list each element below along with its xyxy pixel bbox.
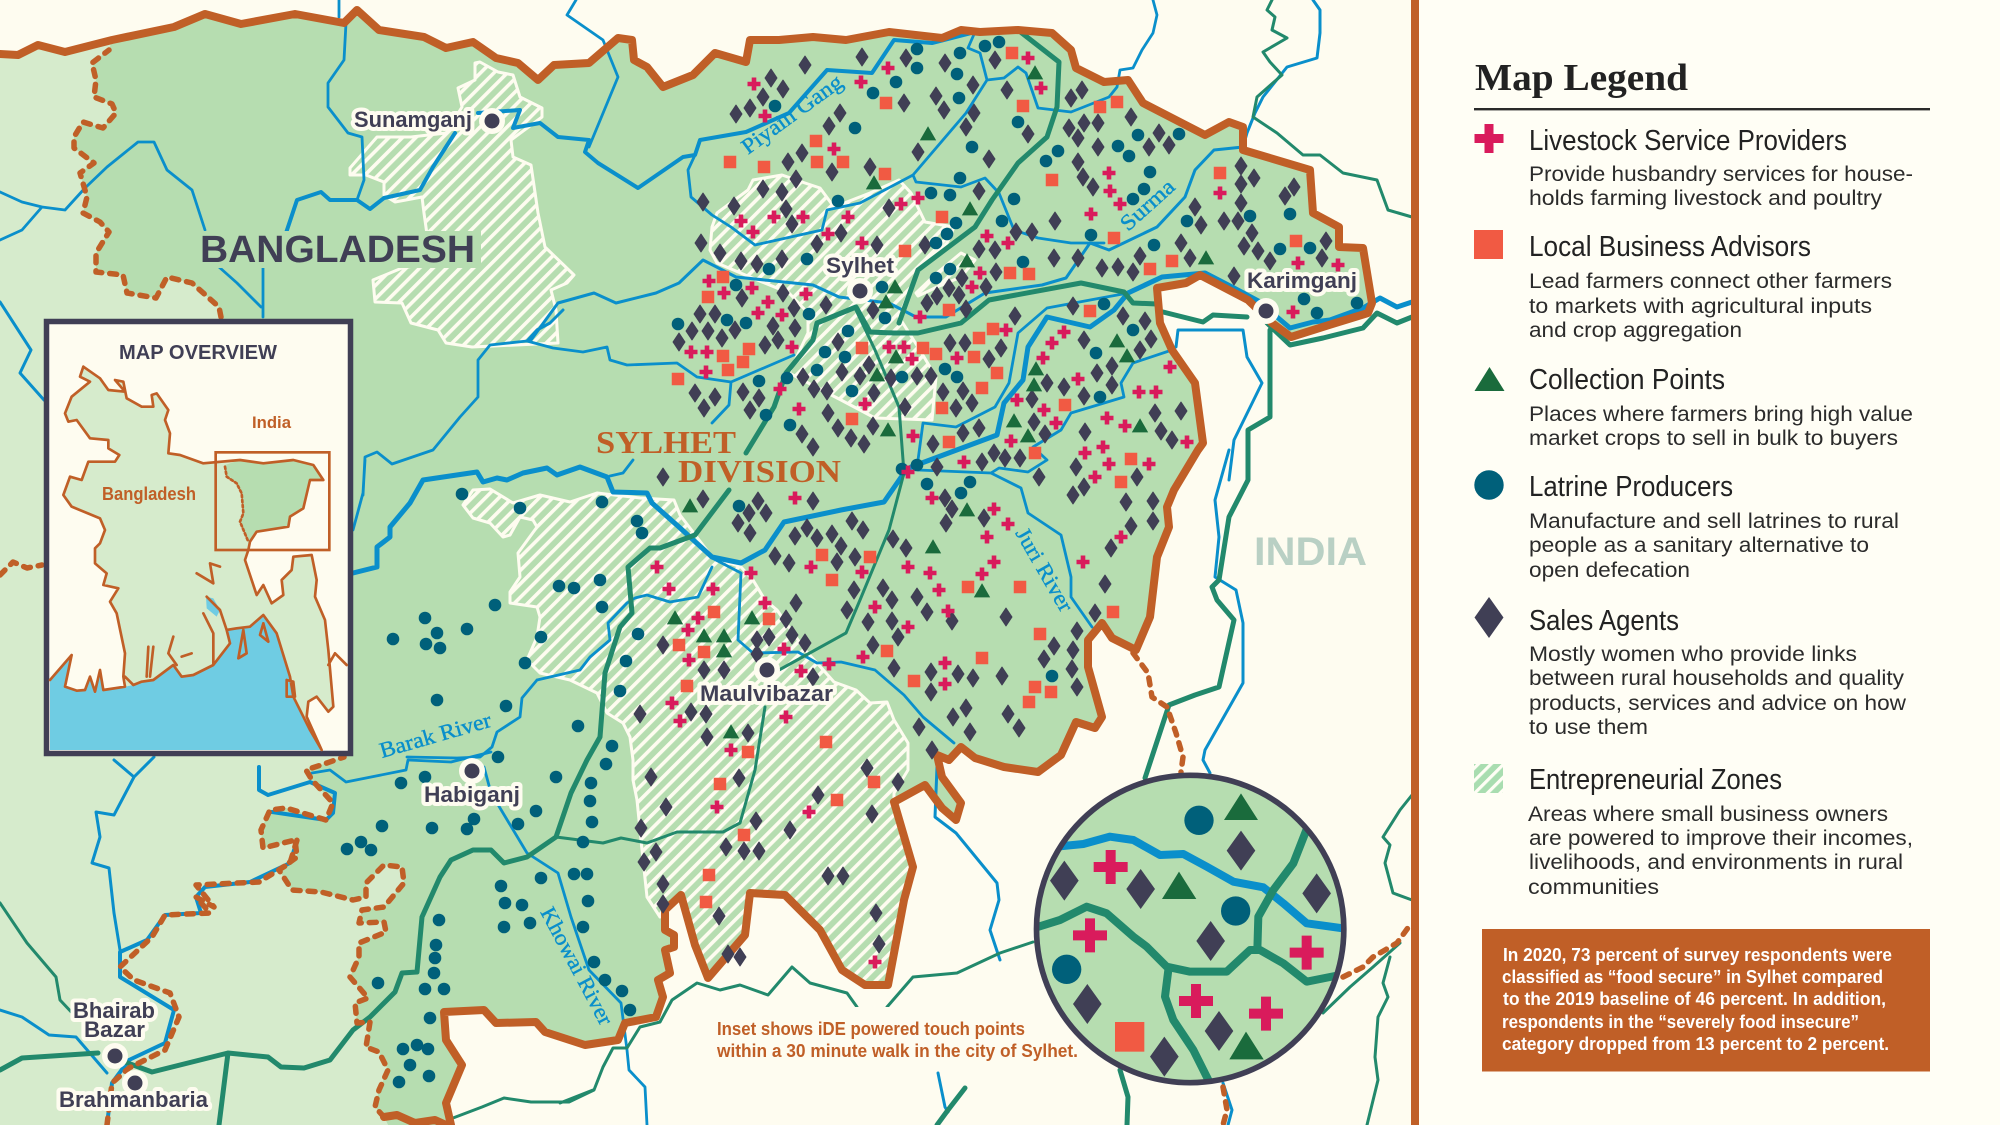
river labels [376, 69, 1180, 1030]
legend item: Entrepreneurial Zones: communities [1528, 875, 1659, 899]
legend item: Entrepreneurial Zones: Entrepreneurial Zones [1529, 764, 1782, 796]
legend item: Sales Agents: to use them [1529, 715, 1648, 739]
city: Maulvibazar: Maulvibazar [700, 681, 833, 706]
legend item: Livestock Service Providers [1474, 124, 1913, 210]
legend item: Latrine Producers: open defecation [1529, 558, 1690, 582]
city: Bhairab Bazar: Bhairab [73, 998, 155, 1023]
city: Habiganj: Habiganj [424, 782, 520, 807]
callout: food security statistics: In 2020, 73 percent of survey respondents were [1503, 944, 1892, 965]
legend item: Entrepreneurial Zones: Areas where small business owners [1528, 802, 1888, 826]
label: INDIA: INDIA [1254, 530, 1367, 574]
legend item: Local Business Advisors [1474, 230, 1892, 342]
legend item: Latrine Producers [1474, 470, 1899, 582]
river: Piyain Gang system [286, 32, 975, 233]
rivers: thin northern tributaries [0, 0, 1157, 317]
legend item: Collection Points [1474, 364, 1913, 450]
label: BANGLADESH: BANGLADESH [200, 229, 475, 271]
entrepreneurial zones (hatched areas) [350, 62, 975, 985]
river: Surma [527, 0, 1320, 341]
right panel: map legend [1411, 0, 2000, 1125]
inset note [708, 1007, 1086, 1071]
heading: Map Legend: Map Legend [1475, 57, 1688, 99]
panel: map overview [46, 322, 350, 754]
city: Brahmanbaria: Brahmanbaria [59, 1087, 209, 1112]
legend item: Local Business Advisors: and crop aggregation [1529, 318, 1742, 342]
road: thin roads [0, 0, 1412, 1125]
city: Sylhet [826, 253, 895, 304]
city: Brahmanbaria [59, 1070, 209, 1112]
callout: food security statistics [1482, 929, 1930, 1072]
cities [59, 107, 1357, 1112]
rivers: south-west and border channels [107, 767, 335, 1125]
city: Sunamganj: Sunamganj [354, 107, 472, 132]
label: Piyain Gang: Piyain Gang [736, 69, 847, 159]
legend item: Entrepreneurial Zones: are powered to improve their incomes, [1529, 826, 1913, 850]
inset circle: city of Sylhet detail [1033, 775, 1350, 1083]
rivers [0, 0, 1412, 1125]
label: Surma: Surma [1115, 173, 1180, 236]
legend item: Local Business Advisors: Lead farmers connect other farmers [1529, 269, 1892, 293]
legend item: Livestock Service Providers: Provide husbandry services for house- [1529, 162, 1913, 186]
label: Khowai River: Khowai River [536, 903, 619, 1030]
callout: food security statistics: respondents in the “severely food insecure” [1502, 1011, 1859, 1032]
city: Habiganj [424, 758, 520, 807]
markers: livestock service providers (pluses) [650, 52, 1344, 968]
legend item: Collection Points: Collection Points [1529, 364, 1725, 396]
legend item: Sales Agents: products, services and advice on how [1529, 691, 1906, 715]
legend item: Collection Points: Places where farmers bring high value [1529, 402, 1913, 426]
river: Kushiyara thick channel [353, 273, 1412, 573]
markers: local business advisors (squares) [678, 53, 1296, 902]
legend item: Local Business Advisors: to markets with agricultural inputs [1529, 294, 1872, 318]
road: main highway [0, 30, 1412, 1125]
callout: food security statistics: to the 2019 baseline of 46 percent. In addition, [1503, 988, 1886, 1009]
roads [0, 0, 1412, 1125]
callout: food security statistics: classified as “food secure” in Sylhet compared [1502, 966, 1883, 987]
legend item: Sales Agents [1474, 597, 1906, 739]
label: SYLHET DIVISION [596, 424, 841, 489]
overview map of Bangladesh [50, 367, 347, 750]
legend item: Entrepreneurial Zones [1474, 764, 1913, 899]
label: Juri River: Juri River [1011, 523, 1079, 617]
label: SYLHET DIVISION: DIVISION [678, 453, 841, 489]
callout: food security statistics: category dropped from 13 percent to 2 percent. [1502, 1033, 1889, 1054]
city: Bhairab Bazar: Bazar [84, 1017, 145, 1042]
land: Sylhet Division [74, 10, 1372, 1125]
city: Sylhet: Sylhet [826, 253, 895, 278]
label: Barak River: Barak River [376, 707, 495, 763]
city: Bhairab Bazar [73, 998, 155, 1069]
city: Karimganj: Karimganj [1247, 268, 1357, 293]
markers: collection points (triangles) [668, 66, 1214, 738]
legend item: Sales Agents: between rural households and quality [1529, 666, 1904, 690]
city: Maulvibazar [700, 657, 833, 706]
land: western Bangladesh [0, 40, 450, 1125]
inset note: Inset shows iDE powered touch points [717, 1018, 1025, 1039]
label: India: India [252, 413, 292, 432]
legend item: Latrine Producers: people as a sanitary alternative to [1529, 533, 1869, 557]
border: dashed district boundary [0, 50, 1410, 1125]
rivers: western thin and eastern thin [0, 302, 1262, 1125]
river: Barak and Khowai [312, 752, 647, 1125]
map background [0, 0, 1412, 1125]
legend item: Sales Agents: Mostly women who provide links [1529, 642, 1857, 666]
legend item: Local Business Advisors: Local Business Advisors [1529, 231, 1811, 263]
border: thick division boundary [0, 10, 1372, 1125]
legend item: Livestock Service Providers: Livestock Service Providers [1529, 125, 1847, 157]
legend item: Latrine Producers: Latrine Producers [1529, 471, 1733, 503]
markers: latrine producers (circles) [347, 42, 1357, 1082]
inset note: within a 30 minute walk in the city of Sylhet. [716, 1040, 1078, 1061]
legend item: Collection Points: market crops to sell in bulk to buyers [1529, 426, 1898, 450]
rivers: central tributaries [353, 293, 1172, 758]
city: Karimganj [1247, 268, 1357, 324]
legend item: Latrine Producers: Manufacture and sell latrines to rural [1529, 509, 1899, 533]
heading: map overview: MAP OVERVIEW [119, 342, 277, 364]
markers: sales agents (diamonds) [634, 48, 1332, 966]
legend item: Livestock Service Providers: holds farming livestock and poultry [1529, 186, 1882, 210]
label: Bangladesh: Bangladesh [102, 484, 196, 504]
legend item: Entrepreneurial Zones: livelihoods, and environments in rural [1529, 850, 1903, 874]
legend item: Sales Agents: Sales Agents [1529, 605, 1679, 637]
label: SYLHET DIVISION: SYLHET [596, 424, 736, 460]
